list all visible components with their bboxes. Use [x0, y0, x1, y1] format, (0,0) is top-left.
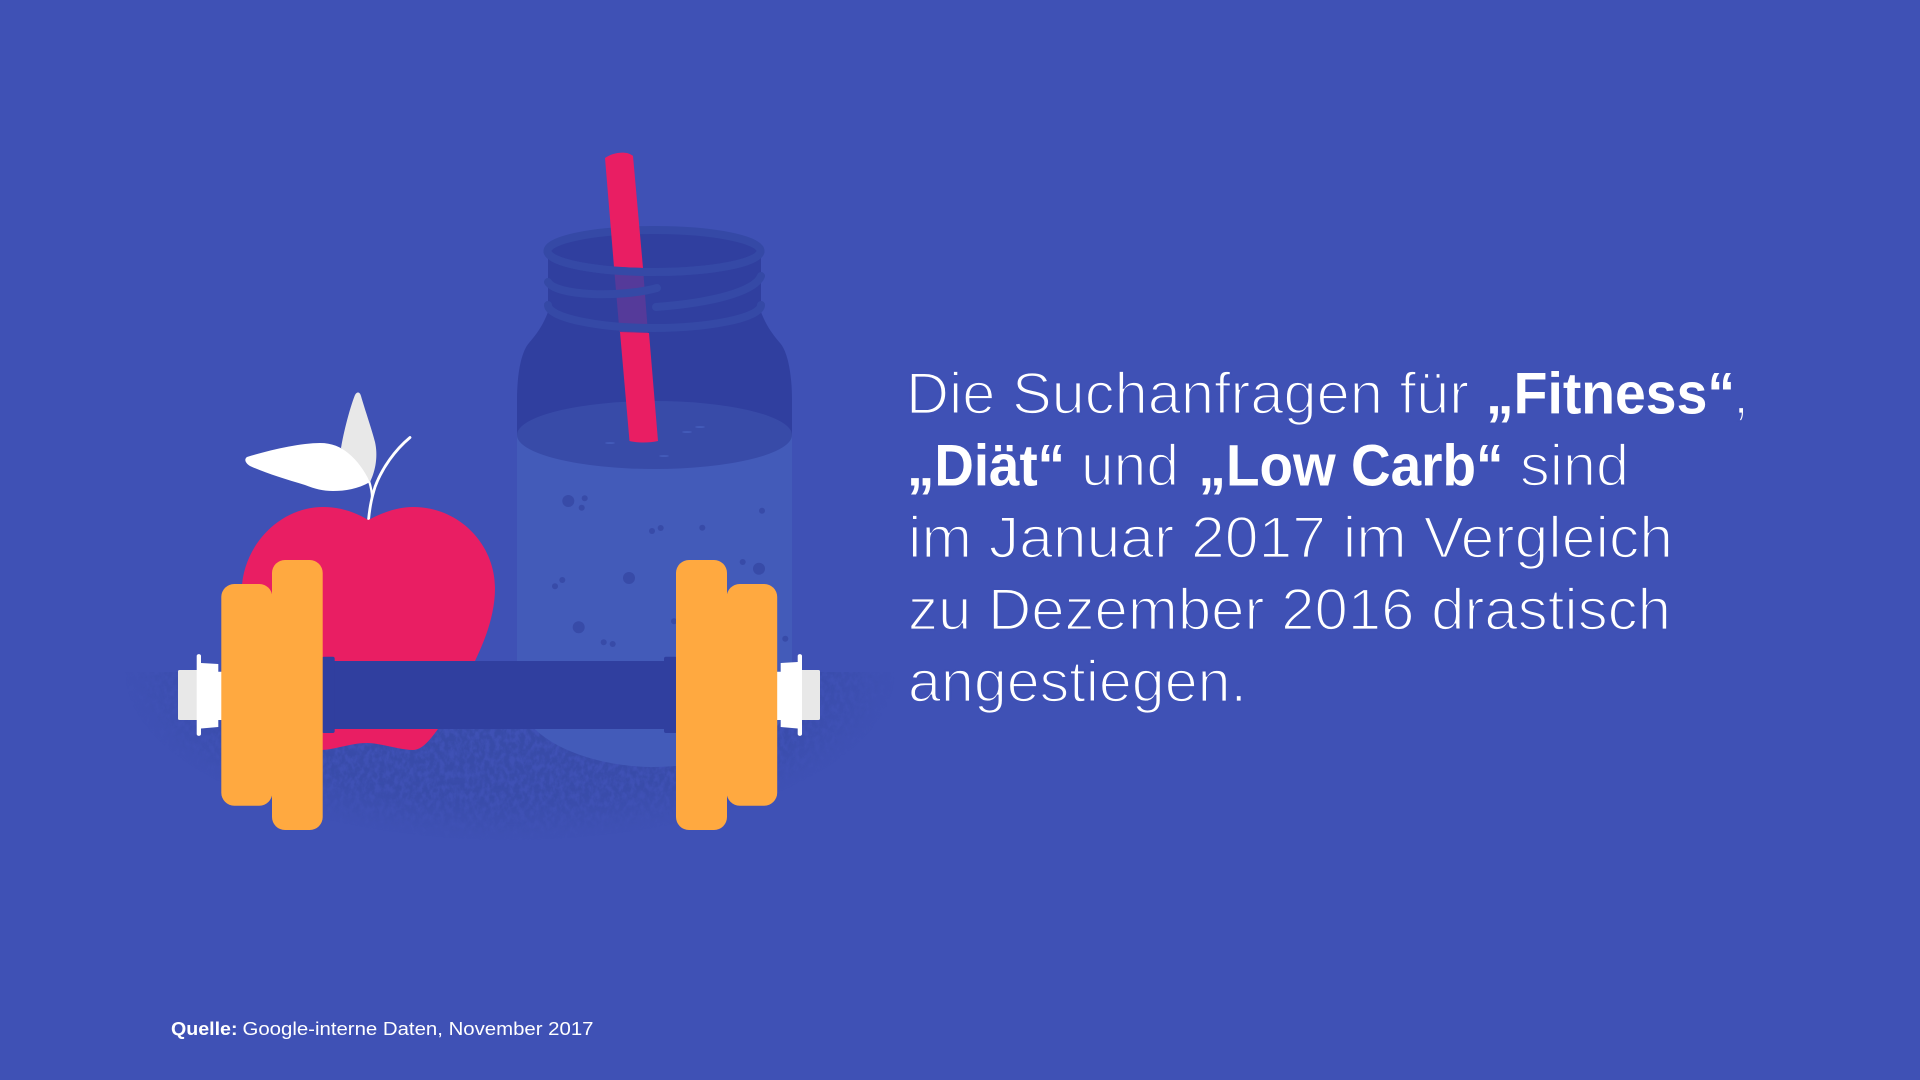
line 5: angestiegen.: [908, 650, 1247, 715]
icon: apple: [242, 392, 495, 750]
right weight plates: [676, 560, 777, 830]
left white flange: [197, 654, 222, 736]
apple stem: [368, 438, 410, 520]
line 1: ,: [1733, 362, 1749, 426]
liquid: [517, 435, 792, 767]
white leaf: [245, 443, 370, 491]
right end cap: [776, 654, 820, 736]
dumbbell bar: [323, 661, 673, 729]
icon: smoothie jar: [517, 153, 792, 767]
line 1: [906, 362, 1749, 426]
surface highlights: [605, 426, 705, 457]
grey leaf: [341, 392, 376, 482]
icon: dumbbell: [178, 560, 820, 830]
line 2: sind: [1520, 434, 1629, 499]
liquid surface: [517, 401, 792, 469]
straw lower part: [620, 332, 658, 442]
line 2: und: [1081, 434, 1179, 499]
line 1: „Fitness“: [1486, 362, 1735, 426]
jar rim back: [548, 230, 760, 272]
right white flange: [776, 654, 802, 736]
textured ground shadow: [218, 672, 824, 810]
left weight plates: [221, 560, 323, 830]
left outer plate: [221, 584, 272, 806]
stem branch: [369, 481, 372, 498]
right collar: [664, 657, 677, 733]
line 2: „Diät“: [907, 434, 1065, 499]
line 3: im Januar 2017 im Vergleich: [908, 506, 1673, 571]
right inner plate: [676, 560, 727, 830]
apple body: [242, 507, 495, 750]
line 1: Die Suchanfragen für: [906, 362, 1469, 426]
left inner plate: [272, 560, 323, 830]
left collar: [322, 657, 335, 733]
source note: Google-interne Daten, November 2017: [242, 1018, 594, 1039]
jar threads: [548, 276, 761, 328]
straw seen through glass: [614, 267, 648, 333]
jar glass upper body: [517, 251, 792, 440]
line 4: zu Dezember 2016 drastisch: [908, 578, 1671, 643]
headline text: [906, 362, 1749, 715]
left end cap: [178, 654, 222, 736]
jar rim front: [548, 251, 760, 272]
straw top: [605, 153, 643, 268]
line 2: „Low Carb“: [1198, 434, 1504, 499]
illustration: smoothie, apple and dumbbell: [178, 152, 824, 830]
source note: Quelle:: [171, 1018, 238, 1039]
right grey cap: [799, 670, 820, 720]
right outer plate: [727, 584, 777, 806]
straw: [605, 153, 658, 442]
liquid bubbles: [552, 495, 788, 647]
line 2: [907, 434, 1629, 499]
left grey cap: [178, 670, 199, 720]
